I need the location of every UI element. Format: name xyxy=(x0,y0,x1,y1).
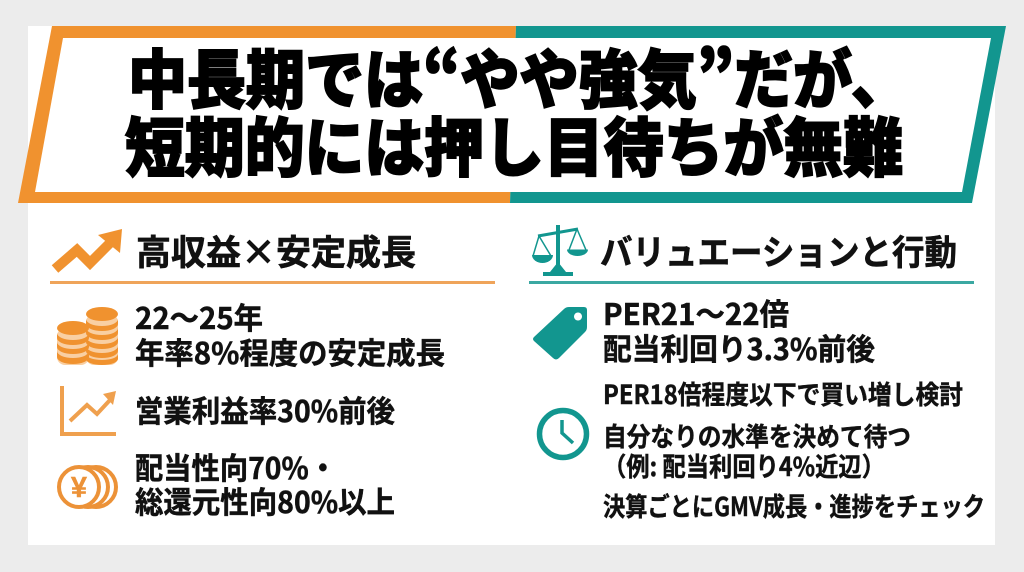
title text xyxy=(125,30,910,190)
heading: valuation: バリュエーションと行動 xyxy=(600,225,957,276)
text: payout ratio xyxy=(135,444,395,522)
text: PER and yield: 配当利回り3.3%前後 xyxy=(603,325,875,369)
heading: high profitability: 高収益×安定成長 xyxy=(136,225,416,276)
title text: 中長期では“やや強気”だが、 xyxy=(128,30,910,122)
text: decide own level xyxy=(603,417,911,484)
text: PER and yield xyxy=(603,290,875,369)
icon: yen coins xyxy=(59,467,116,507)
icon: yen coins: ¥ xyxy=(71,472,87,504)
title banner xyxy=(18,26,1006,203)
text: decide own level: （例: 配当利回り4%近辺） xyxy=(603,447,885,484)
icon: balance scale xyxy=(532,225,588,276)
panel: high profitability and stable growth xyxy=(50,225,495,522)
text: growth rate: 22～25年 xyxy=(135,294,263,338)
icon: rising arrow xyxy=(55,229,122,269)
text: payout ratio: 配当性向70%・ xyxy=(135,444,337,488)
text: operating margin: 営業利益率30%前後 xyxy=(135,387,395,431)
icon: price tag xyxy=(533,307,587,360)
title text: 短期的には押し目待ちが無難 xyxy=(125,98,903,190)
text: PER and yield: PER21～22倍 xyxy=(603,290,789,334)
text: add on PER: PER18倍程度以下で買い増し検討 xyxy=(603,375,963,412)
text: growth rate: 年率8%程度の安定成長 xyxy=(135,329,445,373)
panel: valuation and action xyxy=(529,225,985,524)
icon: line chart xyxy=(62,386,116,434)
icon: clock xyxy=(540,410,586,458)
text: payout ratio: 総還元性向80%以上 xyxy=(135,478,395,522)
text: decide own level: 自分なりの水準を決めて待つ xyxy=(603,417,911,454)
text: growth rate xyxy=(135,294,445,373)
icon: coin stacks xyxy=(57,307,118,365)
